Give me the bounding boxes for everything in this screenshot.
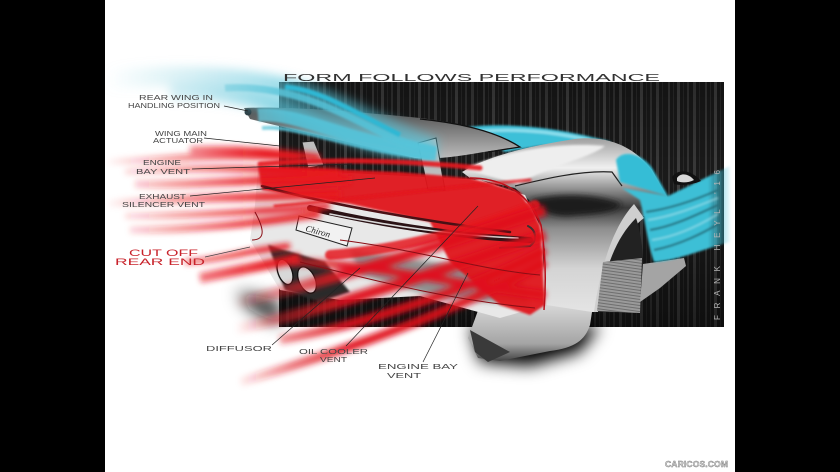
dark shoulder shading: [530, 195, 622, 216]
ground shadow under the car: [236, 292, 600, 366]
wing left tip: [244, 108, 252, 116]
taillight band: [262, 186, 535, 248]
exhaust recess: [268, 245, 350, 302]
dark striped background panel: [279, 82, 724, 327]
label: wing main actuator: ACTUATOR: [153, 138, 203, 145]
label: cut off rear end: [115, 247, 250, 267]
Chiron badge plate: Chiron: [304, 223, 332, 240]
label: rear wing: [128, 95, 248, 111]
label: rear wing: REAR WING IN: [139, 95, 213, 102]
lower diffuser fin: [470, 330, 510, 362]
red air streams left side: [105, 149, 350, 278]
label: cut off rear end: REAR END: [115, 257, 206, 267]
silver rear quarter panel: [462, 138, 672, 312]
red dark detail lines: [252, 212, 540, 308]
label: diffusor: DIFFUSOR: [206, 346, 272, 353]
tyre tread hatching: [597, 258, 642, 313]
blue air over the wing: [105, 77, 436, 158]
signature: FRANK HEYL '16: [713, 169, 722, 320]
front lower body: [640, 258, 686, 302]
red air rear fill: [258, 166, 545, 315]
label: engine bay vent lower: VENT: [387, 373, 422, 380]
fascia dark shading: [350, 250, 530, 305]
red air streams centre: [260, 161, 535, 255]
car body: [250, 138, 686, 362]
label: engine bay vent: ENGINE: [143, 160, 181, 167]
label: engine bay vent lower: ENGINE BAY: [378, 364, 459, 371]
label: engine bay vent: BAY VENT: [136, 169, 191, 176]
wing struts: [302, 138, 445, 190]
wing edge: [420, 119, 520, 152]
rear wing: [244, 108, 520, 190]
label: cut off rear end: CUT OFF: [129, 248, 199, 258]
red air streams diagonal lower: [225, 210, 545, 382]
watermark: CARICOS.COM: [665, 459, 728, 469]
body shoulder line: [515, 172, 622, 186]
label: engine bay vent lower: [378, 273, 468, 380]
deck highlight: [465, 145, 605, 184]
label: oil cooler vent: [299, 206, 478, 364]
Chiron badge plate: [296, 216, 352, 246]
side mirror: [672, 171, 701, 185]
exhaust tips: [274, 257, 320, 296]
label: wing main actuator: [153, 131, 280, 146]
label: rear wing: HANDLING POSITION: [128, 103, 220, 110]
blue air behind car roof: [468, 125, 612, 152]
label: oil cooler vent: VENT: [320, 357, 348, 364]
label: diffusor: [206, 268, 360, 353]
label: engine bay vent: [136, 160, 352, 176]
wheel arch outer lip: [594, 204, 644, 312]
blue air through the side window and front: [616, 154, 730, 262]
rear bumper: [468, 304, 592, 361]
label: exhaust silencer vent: [122, 178, 375, 209]
label: wing main actuator: WING MAIN: [155, 131, 207, 138]
label: exhaust silencer vent: EXHAUST: [139, 194, 187, 201]
tyre: [598, 218, 643, 313]
rear fascia left: [250, 168, 545, 318]
label: oil cooler vent: OIL COOLER: [299, 349, 368, 356]
title: FORM FOLLOWS PERFORMANCE: [283, 73, 661, 84]
label: exhaust silencer vent: SILENCER VENT: [122, 202, 206, 209]
